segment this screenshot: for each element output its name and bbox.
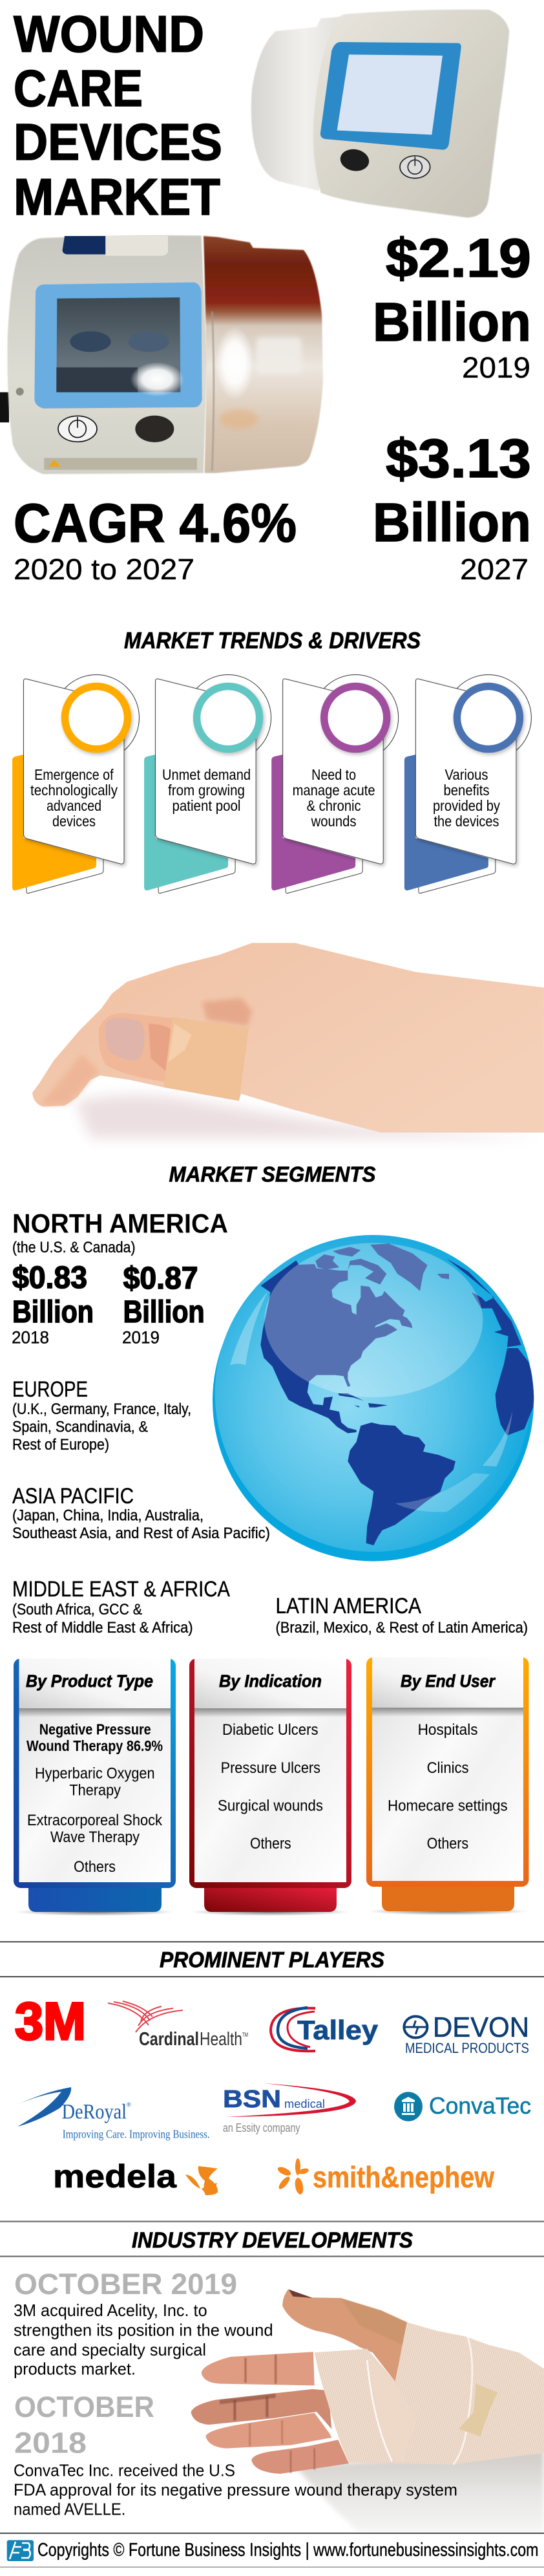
development: October 2018: ConvaTec Inc. received the U.S — [14, 2461, 235, 2480]
region: North America: NORTH AMERICA — [12, 1208, 228, 1239]
development: October 2019: 3M acquired Acelity, Inc. to — [14, 2301, 207, 2320]
logo: Smith and Nephew — [277, 2158, 494, 2195]
list: Hospitals — [418, 1721, 478, 1739]
screw — [16, 388, 24, 396]
logo: Cardinal Health: Health — [200, 2029, 242, 2050]
region: Middle East and Africa: MIDDLE EAST & AFRICA — [12, 1577, 230, 1602]
value 2018 — [12, 1261, 94, 1347]
panel: by end user — [366, 1657, 528, 1915]
finger 2 and palm — [191, 2389, 331, 2429]
image: globe — [213, 1235, 535, 1562]
value 2019: $0.87 — [123, 1261, 198, 1296]
logo: DeRoyal: ® — [127, 2101, 131, 2108]
button: power — [58, 416, 97, 442]
panel: driver 2 — [144, 675, 271, 894]
header — [372, 1657, 523, 1708]
panel: driver 4 — [404, 675, 531, 894]
value 2018: Billion — [12, 1295, 94, 1329]
development: October 2019: care and specialty surgical — [14, 2340, 206, 2359]
region: North America: (the U.S. & Canada) — [12, 1239, 136, 1256]
driver text — [433, 766, 500, 830]
title: WOUND — [14, 5, 204, 63]
development: October 2018: 2018 — [14, 2426, 87, 2460]
thumb — [282, 2290, 407, 2381]
region: Europe: EUROPE — [12, 1377, 88, 1402]
logo: DeRoyal: DeRoyal — [62, 2101, 127, 2124]
list: Pressure Ulcers — [221, 1759, 320, 1777]
title: MARKET — [14, 168, 220, 226]
driver text — [162, 766, 251, 814]
logo: Medela — [53, 2158, 218, 2195]
CAGR — [14, 493, 297, 586]
list — [218, 1721, 323, 1852]
development: October 2019: strengthen its position in the wound — [14, 2321, 273, 2340]
value 2027: $3.13 — [386, 428, 531, 489]
logo: Cardinal Health: Cardinal — [139, 2029, 199, 2050]
list: Clinics — [427, 1759, 469, 1777]
driver text: from growing — [168, 782, 245, 799]
logo: BSN medical: BSN — [223, 2086, 281, 2113]
development: October 2019 — [14, 2268, 273, 2379]
icon: Fortune Business Insights logo — [7, 2540, 34, 2561]
region: Latin America — [275, 1594, 528, 1637]
driver text: provided by — [433, 797, 500, 814]
collection canister — [204, 236, 323, 473]
button: dark — [135, 416, 174, 442]
value 2019: $2.19 — [386, 228, 531, 288]
table shadow — [295, 2451, 544, 2533]
logo: BSN medical: an Essity company — [223, 2121, 300, 2134]
logo: BSN medical — [223, 2083, 356, 2134]
logo: Cardinal Health: TM — [242, 2032, 248, 2038]
adhesive tag — [459, 2384, 497, 2436]
logo: BSN medical: medical — [284, 2098, 325, 2110]
value 2019 — [373, 228, 531, 384]
screen frame — [34, 283, 202, 409]
list: Diabetic Ulcers — [222, 1721, 318, 1739]
panel: by indication — [189, 1658, 351, 1916]
screen — [337, 54, 443, 134]
region: Middle East and Africa — [12, 1577, 230, 1637]
value 2019: Billion — [373, 292, 531, 352]
region: Europe: (U.K., Germany, France, Italy, — [12, 1401, 191, 1418]
development: October 2018: FDA approval for its negative pressure wound therapy system — [14, 2480, 457, 2499]
bandage wrap — [315, 2323, 544, 2465]
region: Asia Pacific: Southeast Asia, and Rest of Asia Pacific) — [12, 1525, 270, 1542]
header — [194, 1658, 346, 1708]
list — [26, 1721, 163, 1876]
region: Asia Pacific: (Japan, China, India, Australia, — [12, 1507, 204, 1524]
continents — [260, 1243, 535, 1545]
header — [19, 1658, 171, 1708]
finger 1 — [202, 2352, 315, 2385]
finger 4 — [251, 2440, 349, 2474]
driver text: Unmet demand — [162, 766, 251, 783]
region: Asia Pacific — [12, 1484, 270, 1542]
cable — [0, 392, 9, 422]
development: October 2018 — [14, 2390, 457, 2519]
development: October 2019: products market. — [14, 2359, 136, 2379]
logo: Cardinal Health — [108, 2001, 248, 2050]
gloss — [264, 1243, 483, 1397]
region: Middle East and Africa: Rest of Middle East & Africa) — [12, 1619, 193, 1637]
list — [388, 1721, 508, 1852]
region: Middle East and Africa: (South Africa, GCC & — [12, 1601, 142, 1618]
list: Others — [74, 1858, 116, 1876]
logo: 3M: 3M — [15, 1992, 86, 2051]
heading: market trends and drivers: MARKET TRENDS & DRIVERS — [124, 628, 421, 653]
driver text: Need to — [311, 766, 356, 783]
list: Extracorporeal Shock — [27, 1812, 163, 1829]
driver text: benefits — [444, 782, 490, 799]
development: October 2019: OCTOBER 2019 — [14, 2268, 237, 2301]
nail — [105, 1018, 145, 1060]
logo: DeRoyal — [17, 2087, 210, 2140]
list: Others — [250, 1835, 291, 1852]
heading: industry developments: INDUSTRY DEVELOPMENTS — [132, 2228, 413, 2253]
value 2018: 2018 — [12, 1328, 49, 1347]
header: By Product Type — [26, 1671, 153, 1691]
region: Europe: Rest of Europe) — [12, 1436, 109, 1454]
driver text: & chronic — [307, 797, 361, 814]
region: North America — [12, 1208, 228, 1347]
title: CARE — [14, 59, 143, 117]
screen frame — [320, 42, 461, 150]
bandage — [163, 1017, 249, 1101]
value 2019: Billion — [123, 1295, 205, 1329]
driver text — [30, 766, 118, 830]
development: October 2018: named AVELLE. — [14, 2500, 125, 2519]
value 2027: Billion — [373, 492, 531, 553]
value 2027 — [373, 428, 531, 586]
driver text: Various — [445, 766, 488, 783]
heading: market segments: MARKET SEGMENTS — [169, 1163, 376, 1186]
logo: Devon Medical Products — [404, 2012, 529, 2056]
logo: ConvaTec: ConvaTec — [429, 2092, 531, 2119]
region: Asia Pacific: ASIA PACIFIC — [12, 1484, 134, 1508]
driver text — [293, 766, 375, 830]
logo: Talley — [271, 2008, 379, 2051]
driver text: manage acute — [293, 782, 375, 799]
value 2027: 2027 — [460, 553, 528, 586]
list: Homecare settings — [388, 1798, 508, 1815]
panel: driver 1 — [12, 675, 140, 894]
button: dark — [339, 147, 371, 173]
list: Wound Therapy 86.9% — [26, 1737, 163, 1754]
value 2019: 2019 — [462, 351, 530, 384]
driver text: Emergence of — [34, 766, 114, 783]
list: Therapy — [69, 1782, 121, 1799]
value 2019: 2019 — [122, 1328, 160, 1347]
finger shading — [41, 1054, 99, 1105]
label — [63, 236, 105, 254]
region: Europe — [12, 1377, 191, 1454]
logo: Smith and Nephew: smith&nephew — [313, 2160, 494, 2194]
logo: Talley: Talley — [297, 2015, 379, 2045]
driver text: technologically — [30, 782, 118, 799]
image: bandaged hand — [191, 2290, 544, 2533]
image: hand with adhesive bandage — [32, 943, 544, 1138]
list: Surgical wounds — [218, 1798, 323, 1815]
driver text: patient pool — [173, 797, 240, 814]
header: By End User — [401, 1671, 496, 1691]
logo: DeRoyal: Improving Care. Improving Business. — [63, 2127, 210, 2140]
title — [14, 5, 222, 226]
logo: Devon Medical Products: DEVON — [433, 2012, 529, 2043]
heading: prominent players: PROMINENT PLAYERS — [160, 1948, 384, 1973]
crease shading — [202, 998, 252, 1026]
driver text: devices — [52, 813, 96, 830]
warning label — [44, 458, 197, 470]
value 2018: $0.83 — [12, 1261, 87, 1295]
title: DEVICES — [14, 113, 222, 171]
CAGR: 2020 to 2027 — [14, 553, 194, 586]
image: wound therapy device, left — [0, 235, 323, 474]
logo: ConvaTec — [394, 2092, 531, 2121]
thumb — [99, 1013, 174, 1082]
list: Hyperbaric Oxygen — [35, 1765, 155, 1783]
driver text: advanced — [47, 797, 101, 814]
finger 3 — [205, 2413, 331, 2449]
driver text: wounds — [311, 813, 357, 830]
CAGR: CAGR 4.6% — [14, 493, 297, 553]
list: Wave Therapy — [50, 1829, 140, 1846]
logo: Medela: medela — [53, 2158, 177, 2195]
panel: by product type — [14, 1658, 176, 1916]
list: Negative Pressure — [39, 1721, 151, 1738]
development: October 2018: OCTOBER — [14, 2390, 154, 2423]
button: power — [400, 156, 430, 178]
screen — [56, 297, 180, 392]
region: Latin America: LATIN AMERICA — [275, 1594, 421, 1618]
image: wound therapy device, top right — [251, 10, 509, 218]
region: Europe: Spain, Scandinavia, & — [12, 1419, 148, 1436]
list: Others — [427, 1835, 468, 1852]
driver text: the devices — [434, 813, 499, 830]
header: By Indication — [219, 1671, 322, 1691]
panel: driver 3 — [271, 675, 399, 894]
value 2019 — [122, 1261, 205, 1347]
